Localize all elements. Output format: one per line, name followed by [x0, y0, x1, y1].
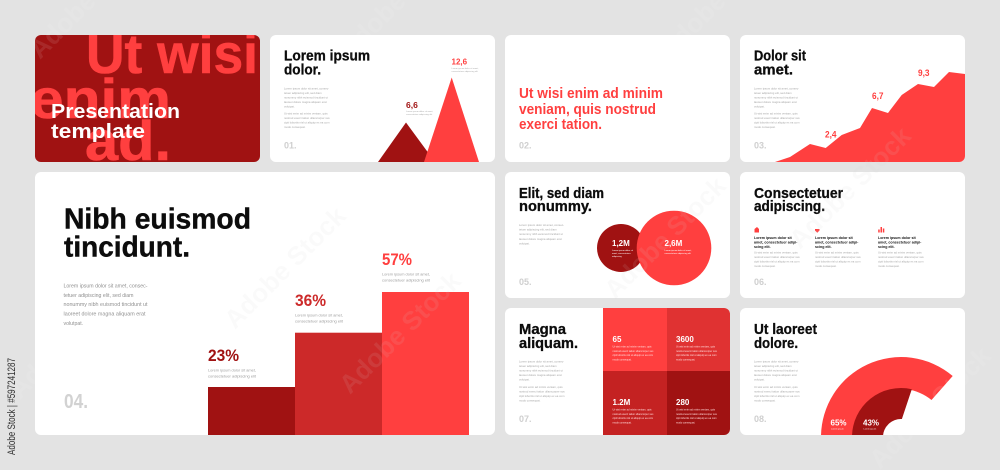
body text: volutpat. [64, 321, 83, 327]
heading [754, 322, 817, 352]
column 1 [754, 227, 800, 268]
label 6,6: 6,6 [406, 100, 418, 110]
heading [754, 186, 843, 215]
label 23% [208, 346, 256, 378]
body text: nostrud exerci tation ullamcorper sus [754, 116, 800, 120]
stock watermark: Adobe Stock [598, 170, 732, 304]
stat 65: 65 [612, 335, 622, 344]
label 43%: 43% [863, 418, 879, 428]
body text [754, 360, 800, 402]
label 1,2M [612, 239, 633, 258]
column 1: modo consequat. [754, 264, 776, 268]
body text: tetuer adipiscing elit, sed diam [754, 364, 792, 368]
column 2: cipit lobortis nisl ut aliquip ex ea com [815, 260, 861, 264]
oversized background words: ad. [85, 109, 171, 172]
body text: laoreet dolore magna aliquam erat [754, 373, 797, 377]
column 3: cipit lobortis nisl ut aliquip ex ea com [878, 260, 924, 264]
body text: tetuer adipiscing elit, sed diam [284, 91, 322, 95]
label 57%: Lorem ipsum dolor sit amet, [382, 272, 430, 276]
label 65%: 65% [830, 418, 847, 428]
heading: Dolor sit [754, 48, 806, 64]
label 36%: Lorem ipsum dolor sit amet, [295, 314, 343, 318]
column 3: amet, consectetuer adipi- [878, 240, 922, 244]
radial arcs [821, 357, 953, 437]
label 23%: 23% [208, 346, 239, 365]
statement text: exerci tation. [519, 117, 602, 133]
stat 65: Ut wisi enim ad minim veniam, quis [612, 346, 652, 348]
stat 280: modo consequat. [676, 421, 695, 424]
heading: Magna [519, 322, 567, 338]
stat 280: nostrud exerci tation ullamcorper sus [676, 413, 718, 416]
body text [284, 86, 330, 129]
heading: aliquam. [519, 336, 578, 352]
statement text: veniam, quis nostrud [519, 102, 656, 118]
slide number: 04. [64, 391, 88, 413]
body text: volutpat. [754, 104, 765, 108]
column 1: amet, consectetuer adipi- [754, 240, 798, 244]
area chart [775, 72, 965, 162]
column 1: scing elit. [754, 245, 771, 249]
slide number: 08. [754, 414, 767, 424]
panel: slide 02 statement [505, 35, 730, 162]
slide number: 06. [754, 277, 767, 287]
label 23%: consectetuer adipiscing elit [208, 374, 256, 378]
body text: nonummy nibh euismod tincidunt ut [754, 95, 798, 99]
cover title: Presentation [51, 101, 180, 123]
stat 1.2M: modo consequat. [612, 421, 632, 424]
cover title: template [51, 121, 145, 143]
label 43%: Lorem ipsum [864, 428, 876, 430]
label 6,6: Lorem ipsum dolor sit amet, [406, 110, 433, 113]
body text: tetuer adipiscing elit, sed diam [64, 293, 134, 299]
body text: cipit lobortis nisl ut aliquip ex ea com [754, 394, 800, 398]
heading: amet. [754, 62, 793, 78]
label 12,6: Lorem ipsum dolor sit amet, [452, 67, 479, 70]
body text: volutpat. [519, 241, 530, 245]
column 1: nostrud exerci tation ullamcorper sus [754, 255, 800, 259]
body text [519, 223, 564, 245]
column 3: nostrud exerci tation ullamcorper sus [878, 255, 924, 259]
label 6,6: consectetuer adipiscing elit [406, 113, 433, 116]
stock id vertical text: Adobe Stock | #597241287 [6, 358, 18, 455]
column 2: nostrud exerci tation ullamcorper sus [815, 255, 861, 259]
label 65%: Lorem ipsum [831, 428, 844, 430]
column 2: amet, consectetuer adipi- [815, 240, 859, 244]
circle chart [597, 211, 711, 285]
stock watermark: Adobe Stock [218, 200, 352, 334]
data labels [825, 68, 930, 140]
stock watermark: Adobe Stock [3, 270, 137, 404]
label 12,6: consectetuer adipiscing elit [452, 70, 478, 73]
body text [754, 86, 800, 129]
heading [64, 204, 251, 264]
stat 280: 280 [676, 398, 690, 407]
label 23%: Lorem ipsum dolor sit amet, [208, 368, 256, 372]
column 3: Lorem ipsum dolor sit [878, 236, 917, 240]
data labels: 6,7 [872, 91, 884, 102]
panel: slide 05 circles [505, 172, 730, 298]
body text: volutpat. [519, 378, 530, 382]
heading [754, 48, 806, 78]
body text: Ut wisi enim ad minim veniam, quis [284, 111, 328, 115]
body text: nonummy nibh euismod tincidunt ut [64, 302, 148, 308]
panel: slide 07 stat grid [505, 308, 730, 435]
panel: slide 01 triangles [270, 35, 495, 162]
body text: modo consequat. [754, 398, 776, 402]
stat 3600: Ut wisi enim ad minim veniam, quis [676, 346, 716, 348]
body text: nostrud exerci tation ullamcorper sus [754, 390, 800, 394]
cover title [51, 101, 180, 143]
body text: Lorem ipsum dolor sit amet, consec- [754, 360, 799, 364]
body text: Lorem ipsum dolor sit amet, consec- [519, 360, 564, 364]
slide number: 07. [519, 414, 532, 424]
heading: dolore. [754, 336, 798, 352]
stat 65: cipit lobortis nisl ut aliquip ex ea com [612, 354, 653, 357]
column 2: Lorem ipsum dolor sit [815, 236, 854, 240]
body text: Ut wisi enim ad minim veniam, quis [754, 385, 798, 389]
stat 65 [612, 335, 654, 361]
body text: nonummy nibh euismod tincidunt ut [519, 368, 563, 372]
column 2: scing elit. [815, 245, 832, 249]
heading: dolor. [284, 62, 321, 78]
body text: laoreet dolore magna aliquam erat [754, 100, 797, 104]
stat 280 [676, 398, 718, 424]
heading [519, 322, 578, 352]
panel: slide 03 area chart [740, 35, 965, 162]
stat 1.2M: cipit lobortis nisl ut aliquip ex ea com [612, 417, 653, 420]
body text: Lorem ipsum dolor sit amet, consec- [754, 86, 799, 90]
column 3: Ut wisi enim ad minim veniam, quis [878, 250, 922, 254]
body text: modo consequat. [754, 125, 776, 129]
label 1,2M: 1,2M [612, 239, 630, 248]
column 3: modo consequat. [878, 264, 900, 268]
column 3 [878, 227, 924, 268]
stat 1.2M: Ut wisi enim ad minim veniam, quis [612, 408, 652, 412]
statement text: Ut wisi enim ad minim [519, 86, 663, 102]
slide number: 03. [754, 140, 767, 150]
oversized background words: enim [30, 67, 171, 130]
panel: cover slide [35, 35, 260, 162]
colored grid [603, 308, 730, 435]
label 57% [382, 250, 430, 282]
body text: nonummy nibh euismod tincidunt ut [754, 368, 798, 372]
label 36%: 36% [295, 291, 326, 310]
heading: Ut laoreet [754, 322, 817, 338]
stat 3600: nostrud exerci tation ullamcorper sus [676, 350, 718, 353]
heading: Lorem ipsum [284, 48, 370, 64]
stat 1.2M: nostrud exerci tation ullamcorper sus [612, 413, 654, 416]
heading: Nibh euismod [64, 204, 251, 236]
label 36%: consectetuer adipiscing elit [295, 320, 343, 324]
body text: laoreet dolore magna aliquam erat [519, 237, 562, 241]
stat 3600 [676, 335, 718, 361]
body text: nonummy nibh euismod tincidunt ut [519, 232, 563, 236]
slide number: 01. [284, 140, 297, 150]
body text [64, 284, 148, 327]
heading [519, 186, 604, 215]
oversized background words [35, 35, 254, 161]
data labels: 2,4 [825, 130, 837, 140]
column 3: scing elit. [878, 245, 895, 249]
column 2: Ut wisi enim ad minim veniam, quis [815, 250, 859, 254]
panel: slide 08 radial chart [740, 308, 965, 437]
body text: cipit lobortis nisl ut aliquip ex ea com [519, 394, 565, 398]
body text: Ut wisi enim ad minim veniam, quis [754, 111, 798, 115]
heading: adipiscing. [754, 199, 825, 215]
body text: laoreet dolore magna aliquam erat [519, 373, 562, 377]
body text: modo consequat. [284, 125, 306, 129]
column 2: modo consequat. [815, 264, 837, 268]
slide number: 05. [519, 277, 532, 287]
column 1: cipit lobortis nisl ut aliquip ex ea com [754, 260, 800, 264]
stat 280: cipit lobortis nisl ut aliquip ex ea com [676, 417, 717, 420]
heading: nonummy. [519, 199, 592, 215]
bars [208, 292, 469, 435]
stat 3600: modo consequat. [676, 358, 695, 361]
body text: cipit lobortis nisl ut aliquip ex ea com [284, 120, 330, 124]
body text [519, 360, 565, 402]
body text: tetuer adipiscing elit, sed diam [519, 364, 557, 368]
slide number: 02. [519, 140, 532, 150]
label 2,6M: 2,6M [664, 239, 683, 248]
body text: volutpat. [754, 378, 765, 382]
column 1: Lorem ipsum dolor sit [754, 236, 793, 240]
body text: Lorem ipsum dolor sit amet, consec- [64, 284, 148, 290]
body text: nostrud exerci tation ullamcorper sus [284, 116, 330, 120]
label 2,6M: consectetuer adipiscing elit [664, 252, 691, 255]
body text: tetuer adipiscing elit, sed diam [519, 228, 557, 232]
label 36% [295, 291, 343, 324]
heading: Consectetuer [754, 186, 843, 202]
body text: nostrud exerci tation ullamcorper sus [519, 390, 565, 394]
data labels: 9,3 [918, 68, 930, 79]
label 57%: 57% [382, 250, 412, 269]
body text: Ut wisi enim ad minim veniam, quis [519, 385, 563, 389]
body text: laoreet dolore magna aliquam erat [284, 100, 327, 104]
stat 1.2M: 1.2M [612, 398, 631, 407]
panel: slide 04 step bar chart [35, 172, 495, 435]
label 2,6M: Lorem ipsum dolor sit amet, [664, 249, 692, 252]
stat 3600: 3600 [676, 335, 694, 344]
body text: nonummy nibh euismod tincidunt ut [284, 95, 328, 99]
label 1,2M: adipiscing [612, 256, 623, 258]
body text: tetuer adipiscing elit, sed diam [754, 91, 792, 95]
body text: volutpat. [284, 104, 295, 108]
heading [284, 48, 370, 78]
label 12,6 [452, 58, 479, 73]
statement text [519, 86, 663, 133]
stock watermark: Adobe Stock [783, 120, 917, 254]
body text: modo consequat. [519, 398, 541, 402]
stat 280: Ut wisi enim ad minim veniam, quis [676, 408, 716, 412]
stat 65: nostrud exerci tation ullamcorper sus [612, 350, 654, 353]
heading: Elit, sed diam [519, 186, 604, 202]
label 6,6 [406, 100, 433, 116]
panel: slide 06 three columns [740, 172, 965, 298]
body text: cipit lobortis nisl ut aliquip ex ea com [754, 120, 800, 124]
column 1: Ut wisi enim ad minim veniam, quis [754, 250, 798, 254]
stat 65: modo consequat. [612, 358, 632, 361]
label 2,6M [664, 239, 692, 255]
oversized background words: Ut wisi [86, 22, 258, 85]
triangle chart [378, 78, 479, 162]
body text: laoreet dolore magna aliquam erat [64, 312, 146, 318]
body text: Lorem ipsum dolor sit amet, consec- [519, 223, 564, 227]
label 57%: consectetuer adipiscing elit [382, 278, 430, 282]
stock watermark: Adobe Stock [333, 265, 467, 399]
label 1,2M: Lorem ipsum dolor sit [612, 249, 633, 252]
label 1,2M: amet, consectetuer [612, 252, 631, 255]
stat 1.2M [612, 398, 654, 424]
label 12,6: 12,6 [452, 58, 468, 66]
body text: Lorem ipsum dolor sit amet, consec- [284, 86, 329, 90]
heading: tincidunt. [64, 232, 190, 264]
column 2 [815, 229, 861, 268]
stat 3600: cipit lobortis nisl ut aliquip ex ea com [676, 354, 717, 357]
